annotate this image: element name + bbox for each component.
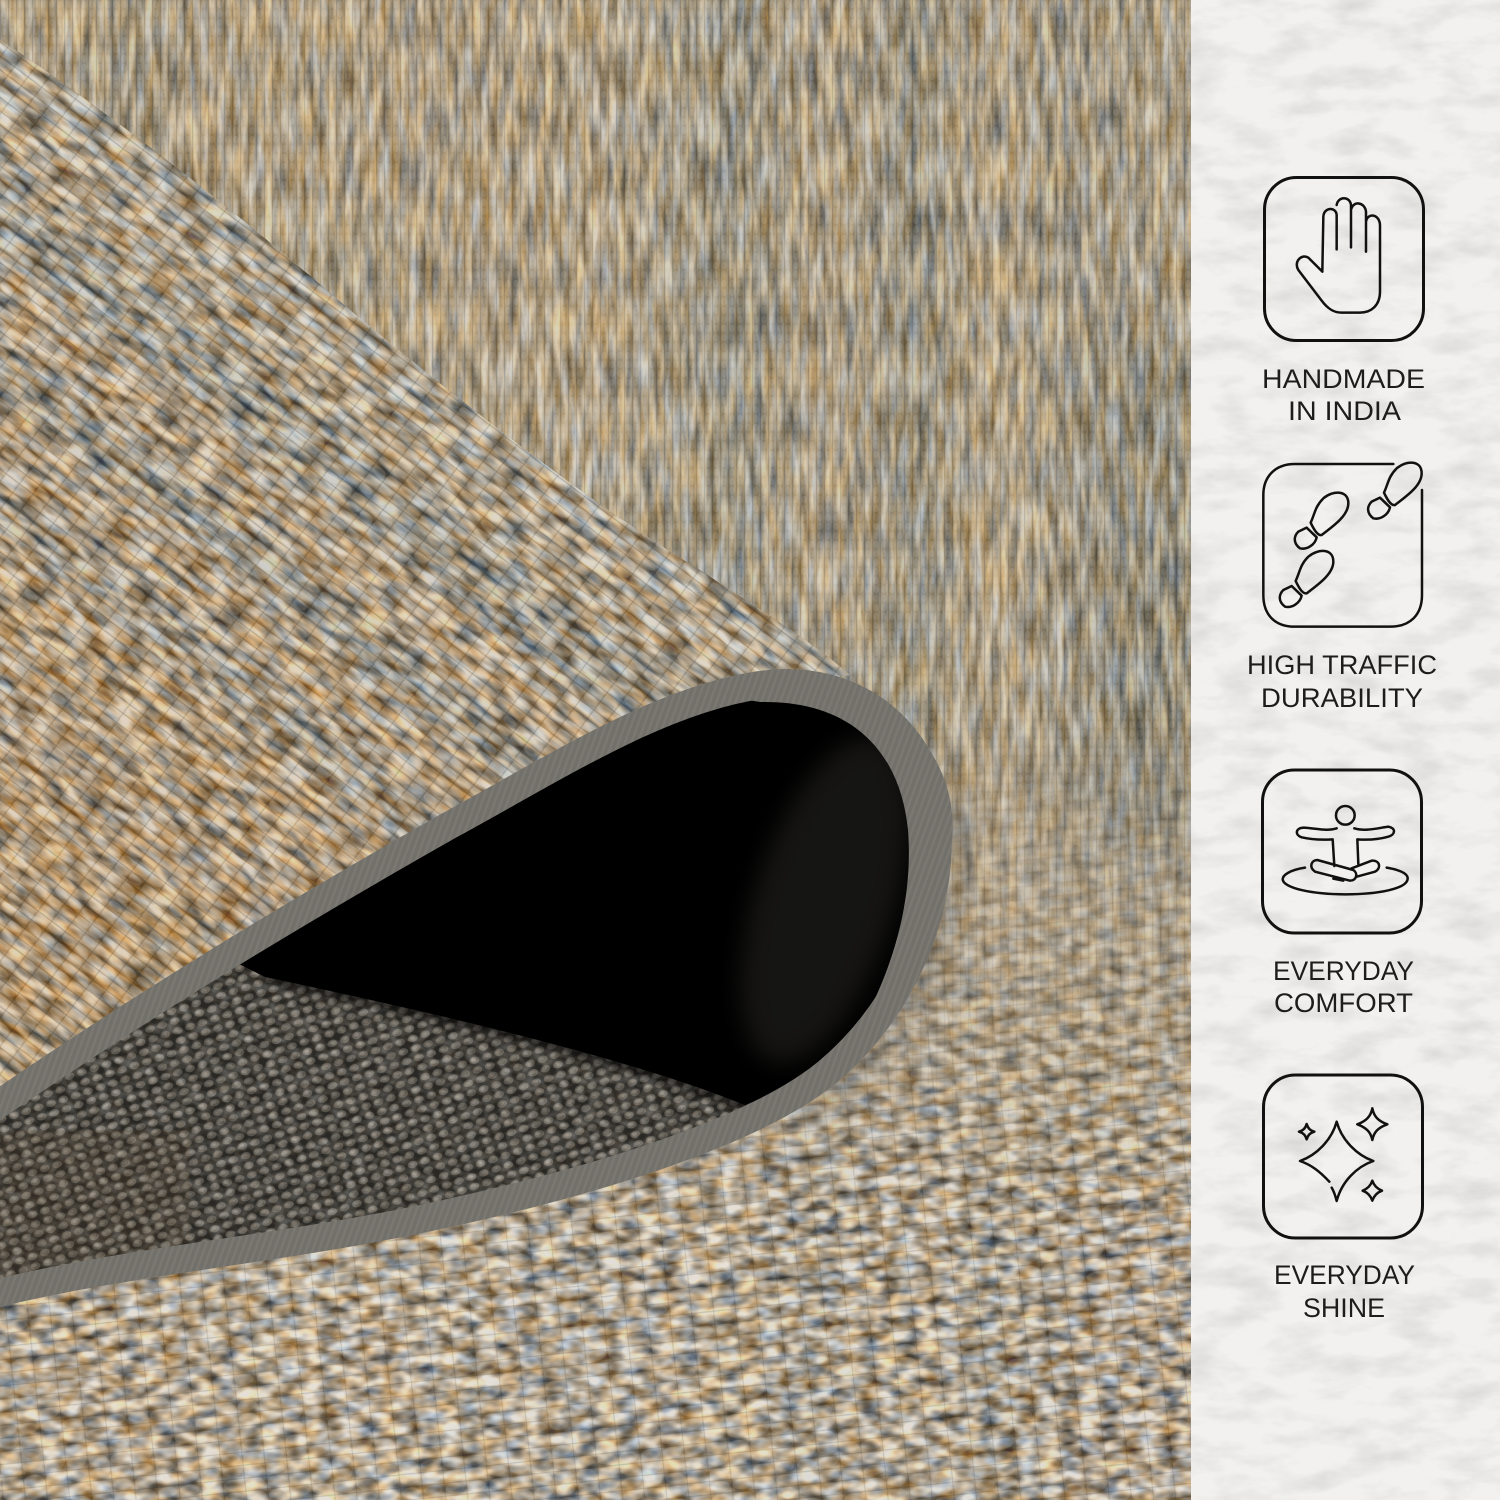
white side panel [1191, 0, 1500, 1500]
label: everyday shine: EVERYDAY [1274, 1260, 1415, 1290]
label: everyday shine [1274, 1260, 1415, 1323]
icon: sparkles [1264, 1075, 1422, 1238]
rolled top surface [0, 40, 850, 1086]
icon: meditating figure [1262, 770, 1422, 933]
label: everyday shine: SHINE [1303, 1293, 1385, 1323]
feature: everyday shine [1264, 1075, 1422, 1323]
bound edge of the rug [0, 678, 953, 1295]
label: high traffic durability [1247, 650, 1437, 713]
rug floor background [0, 0, 1200, 1500]
label: everyday comfort: EVERYDAY [1273, 956, 1414, 986]
shadow under the roll [800, 800, 960, 1120]
label: handmade in india [1262, 364, 1425, 426]
feature: high traffic durability [1247, 463, 1437, 713]
rug underside [0, 964, 756, 1278]
icon: footprints [1263, 463, 1422, 627]
feature: handmade in india [1262, 178, 1425, 426]
icon: hand [1264, 178, 1424, 340]
rolled rug corner [0, 0, 960, 1367]
feature: everyday comfort [1262, 770, 1422, 1018]
label: high traffic durability: HIGH TRAFFIC [1247, 650, 1437, 680]
dark hollow of the roll [240, 700, 909, 1105]
label: high traffic durability: DURABILITY [1261, 683, 1423, 713]
soft lower edge of the hollow [265, 977, 745, 1105]
label: handmade in india: IN INDIA [1288, 396, 1401, 426]
label: everyday comfort [1273, 956, 1414, 1018]
label: handmade in india: HANDMADE [1262, 364, 1425, 394]
label: everyday comfort: COMFORT [1274, 988, 1413, 1018]
